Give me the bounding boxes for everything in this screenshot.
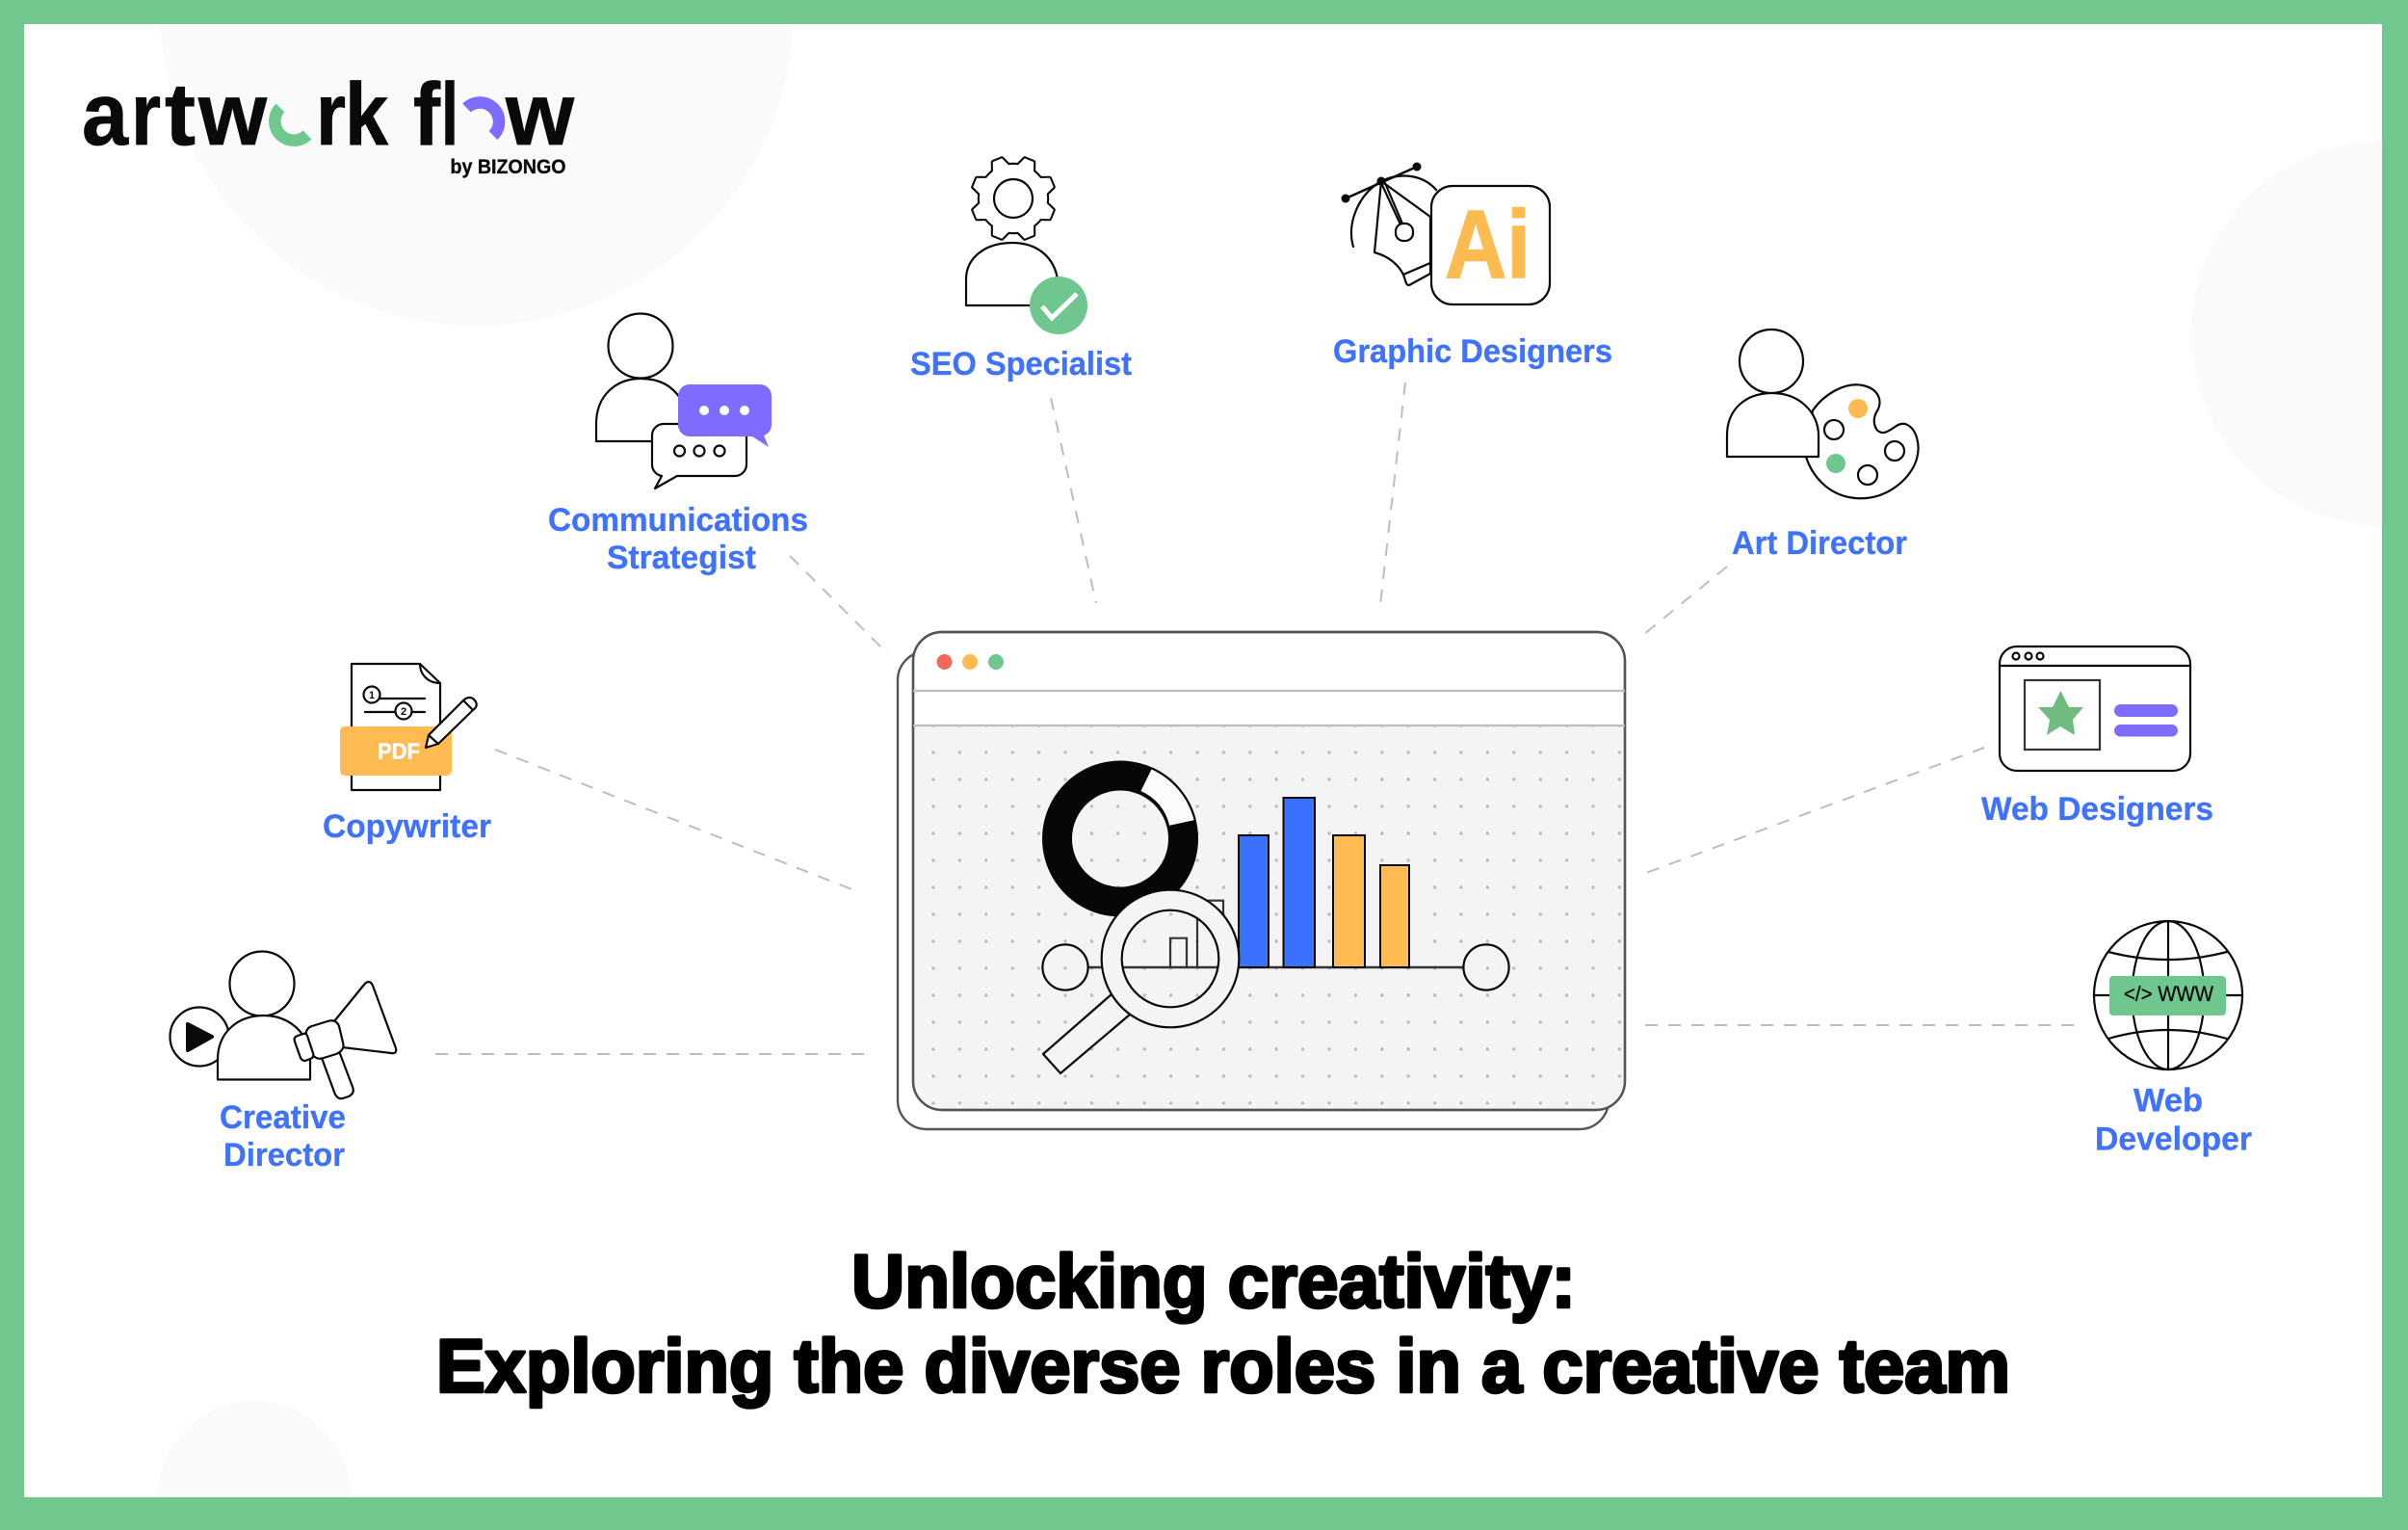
label: Art Director [1732,525,1907,562]
central browser window illustration [898,632,1625,1129]
icon: pen tool and Ai badge: Ai [1445,191,1531,299]
icon: PDF document and pencil: 2 [401,706,406,718]
bar chart [1042,798,1509,990]
title: Exploring the diverse roles in a creative team [436,1324,2010,1409]
role: art director [1727,330,1919,562]
label: SEO Specialist [910,346,1132,382]
logo: artwork flow by BIZONGO: t [165,66,196,164]
logo: artwork flow by BIZONGO: r [131,66,161,164]
logo: artwork flow by BIZONGO [82,66,574,178]
logo: artwork flow by BIZONGO: by BIZONGO [451,156,566,178]
label: Graphic Designers [1333,333,1612,370]
label: Director [223,1137,345,1174]
back window [898,651,1609,1129]
logo: artwork flow by BIZONGO: r [316,66,346,164]
role: graphic designers [1333,162,1612,370]
window outline and header rules [913,632,1625,1110]
logo: artwork flow by BIZONGO: f [413,66,440,164]
role: SEO specialist [910,157,1132,382]
icon: globe with www tag: </> WWW [2124,982,2213,1006]
icon: person with gear and check [966,157,1087,334]
role: web developer [2094,921,2252,1158]
dotted content area [913,721,1625,1110]
front window [913,632,1625,1110]
label: Strategist [607,540,756,576]
logo: artwork flow by BIZONGO: w [505,66,574,164]
label: Communications [548,502,808,539]
label: Web [2133,1083,2203,1120]
donut chart [1042,761,1198,916]
magnifying glass [1043,890,1239,1073]
dashed connector lines [435,382,2074,1054]
logo: artwork flow by BIZONGO: a [82,66,129,164]
icon: browser window with star [2000,646,2190,771]
icon: person with palette [1727,330,1919,498]
title: Unlocking creativity: [851,1239,1576,1324]
icon: person with play button and megaphone [170,952,396,1098]
label: Developer [2095,1121,2252,1158]
role: copywriter [323,664,491,845]
icon: PDF document and pencil: PDF [378,738,420,763]
label: Copywriter [323,808,491,845]
icon: pen tool and Ai badge [1341,162,1550,304]
role: creative director [170,952,396,1174]
icon: globe with www tag [2094,921,2242,1069]
icon: person with speech bubbles [596,314,772,488]
label: Creative [220,1099,346,1136]
logo: artwork flow by BIZONGO: k [345,66,389,164]
traffic light dots [936,654,1004,670]
role: web designers [1981,646,2213,828]
title [436,1239,2010,1409]
icon: PDF document and pencil: 1 [369,690,375,701]
logo: artwork flow by BIZONGO: l [441,66,458,164]
logo: artwork flow by BIZONGO: w [197,66,267,164]
label: Web Designers [1981,791,2213,828]
icon: PDF document and pencil [340,664,477,790]
role: communications strategist [548,314,808,576]
